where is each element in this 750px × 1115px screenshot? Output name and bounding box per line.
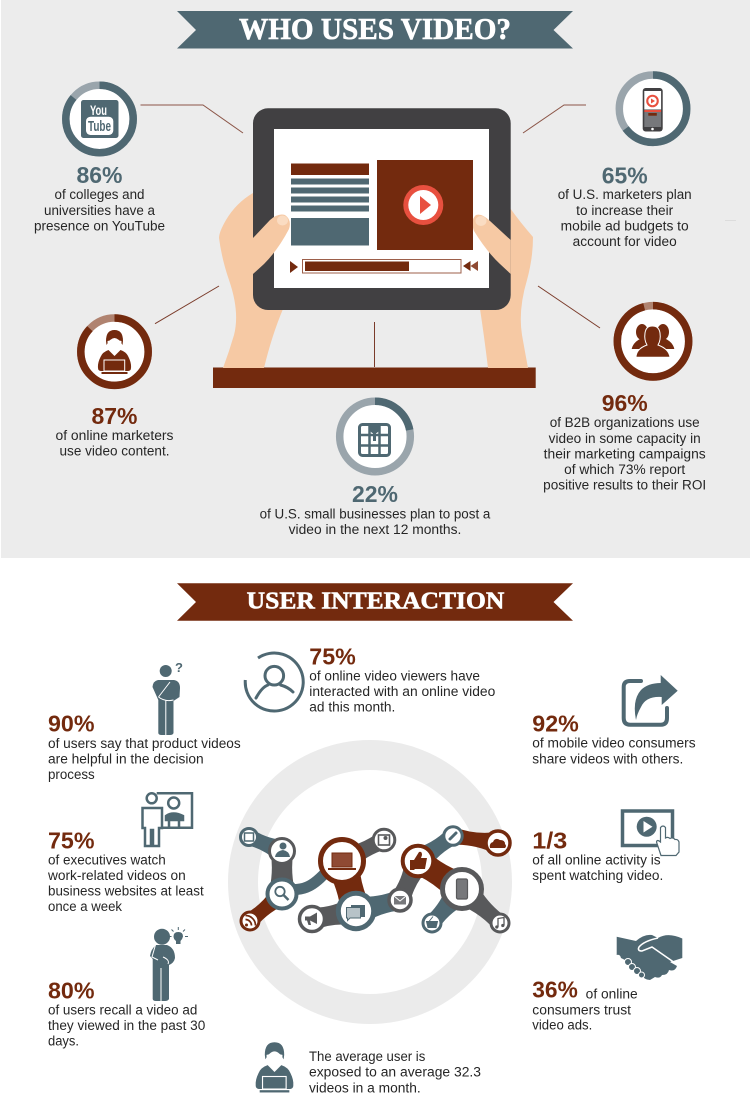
text: 36% trust: 36% — [532, 977, 578, 1003]
text: 75% viewers: interacted with an online video — [309, 684, 495, 699]
stat: marketers 87% — [56, 318, 174, 459]
icon: calendar — [360, 424, 390, 456]
stat: 80% recall — [48, 927, 205, 1048]
left thumb — [253, 215, 290, 274]
text: 80% recall — [48, 977, 205, 1048]
heading banner: user interaction — [177, 583, 573, 621]
stat: small businesses 22% — [260, 401, 491, 537]
stat: mobile 65% — [558, 75, 692, 249]
stat: 36% trust — [532, 935, 682, 1032]
icon: thinking man: ? — [175, 660, 183, 675]
node: basket — [423, 914, 441, 932]
icon: thinking man — [152, 660, 183, 735]
text: average user: The average user is — [309, 1049, 426, 1064]
icon: share arrow — [624, 675, 678, 725]
text: 96%: of B2B organizations use — [550, 415, 700, 430]
text: 65%: mobile ad budgets to — [561, 219, 689, 234]
icon: youtube: You — [90, 102, 107, 118]
text: 90% users: are helpful in the decision — [48, 751, 204, 766]
text: 1/3 activity: of all online activity is — [532, 852, 661, 867]
text: 65%: account for video — [573, 234, 677, 249]
progress bar — [290, 260, 478, 273]
stat: youtube 86% — [34, 85, 165, 234]
text: 75% executives: once a week — [48, 899, 122, 914]
text: 87%: use video content. — [60, 444, 170, 459]
node: add user — [270, 838, 294, 864]
text: 22% — [260, 481, 491, 537]
icon: presenter at screen — [142, 793, 192, 846]
network diagram — [240, 827, 510, 932]
article text block — [291, 164, 369, 246]
text: 75% executives — [47, 827, 204, 914]
text: 96%: their marketing campaigns — [544, 447, 706, 462]
text: 90% users: process — [48, 767, 95, 782]
heading banner: who uses video — [177, 11, 573, 48]
text: 96% — [543, 390, 706, 493]
icon: youtube — [81, 100, 118, 138]
text: 96%: positive results to their ROI — [543, 478, 706, 493]
icon: video with pointer — [622, 811, 679, 856]
stat: b2b 96% — [543, 306, 706, 493]
text: 36% trust — [532, 977, 638, 1032]
text: 75% viewers: of online video viewers have — [309, 669, 480, 684]
text: 80% recall: of users recall a video ad — [48, 1002, 197, 1017]
stat: average user — [256, 1042, 481, 1095]
node: laptop — [320, 840, 364, 882]
stat: 90% users — [48, 660, 241, 782]
stat: 75% viewers — [245, 643, 495, 715]
text: 65%: 65% — [602, 163, 648, 189]
text: 65%: of U.S. marketers plan — [558, 187, 692, 202]
icon: group of people — [632, 324, 674, 357]
text: 86%: of colleges and — [54, 187, 144, 202]
node: search — [268, 880, 296, 908]
text: 75% executives: work-related videos on — [47, 868, 186, 883]
tablet body — [253, 108, 511, 310]
text: 75% executives: 75% — [48, 827, 94, 853]
text: 86%: 86% — [76, 162, 122, 188]
node: music — [491, 914, 509, 932]
donut 87% — [81, 318, 148, 385]
text: 75% viewers: ad this month. — [309, 700, 395, 715]
text: 96%: of which 73% report — [564, 462, 685, 477]
right thumbnail — [476, 216, 486, 226]
text: 92% share: share videos with others. — [532, 751, 683, 766]
node: tablet — [442, 870, 482, 908]
right thumb — [472, 215, 511, 274]
left thumbnail — [277, 216, 288, 226]
text: 75% executives: business websites at least — [48, 884, 204, 899]
connectors — [246, 829, 505, 929]
text: 80% recall: they viewed in the past 30 — [48, 1018, 205, 1033]
node: mail — [389, 889, 411, 911]
text: 87%: 87% — [92, 403, 138, 429]
heading banner: who uses video: WHO USES VIDEO? — [239, 11, 511, 46]
text: 1/3 activity: spent watching video. — [532, 868, 663, 883]
stat: 92% share — [532, 675, 696, 766]
node: cloud — [486, 831, 510, 855]
text: 96%: video in some capacity in — [549, 431, 701, 446]
video player — [377, 160, 473, 250]
text: 90% users: of users say that product videos — [48, 736, 241, 751]
text: 92% share — [532, 711, 696, 766]
panel: who uses video — [1, 0, 750, 558]
tablet illustration — [213, 108, 536, 388]
donut 96% — [617, 306, 689, 377]
text: 80% recall: days. — [48, 1033, 79, 1048]
node: rss — [241, 912, 259, 930]
icon: man with idea bulb — [150, 927, 188, 1001]
left hand — [219, 193, 300, 368]
text: 92% share: of mobile video consumers — [532, 736, 696, 751]
icon: user circle — [245, 653, 303, 711]
text: 75% viewers: 75% — [309, 643, 356, 669]
node: video file — [240, 828, 258, 846]
connector lines — [140, 105, 600, 367]
panel: user interaction — [47, 583, 696, 1095]
text: 36% trust: video ads. — [532, 1018, 592, 1032]
text: 90% users: 90% — [48, 711, 94, 737]
text: 80% recall: 80% — [48, 977, 94, 1003]
text: average user: exposed to an average 32.3 — [309, 1065, 481, 1080]
text: 90% users — [48, 711, 241, 782]
right hand — [465, 208, 533, 368]
text: 92% share: 92% — [532, 711, 579, 737]
text: 86% — [34, 162, 165, 234]
node: thumbs up — [403, 846, 433, 876]
text: 96%: 96% — [602, 390, 648, 416]
node: link — [444, 827, 462, 845]
tablet screen — [274, 129, 489, 288]
text: 36% trust: of online — [586, 986, 638, 1001]
icon: user with laptop — [256, 1042, 293, 1092]
text: average user — [309, 1049, 481, 1095]
node: chat — [338, 893, 374, 929]
text: 87%: of online marketers — [56, 428, 174, 443]
node: megaphone — [300, 906, 324, 932]
text: average user: videos in a month. — [309, 1080, 421, 1095]
icon: phone — [643, 88, 663, 132]
text: 75% viewers — [309, 643, 495, 715]
stat: 1/3 activity — [532, 811, 679, 883]
text: 22%: video in the next 12 months. — [289, 522, 461, 537]
text: 1/3 activity: 1/3 — [532, 827, 567, 853]
heading banner: user interaction: USER INTERACTION — [247, 588, 505, 614]
text: 86%: universities have a — [44, 203, 155, 218]
text: 65% — [558, 163, 692, 249]
stat: 75% executives — [47, 793, 204, 914]
text: 1/3 activity — [532, 827, 663, 883]
node: picture — [373, 829, 395, 851]
donut 86% — [66, 85, 133, 153]
large grey ring — [243, 755, 497, 1009]
icon: youtube: Tube — [88, 118, 111, 135]
text: 22%: of U.S. small businesses plan to post a — [260, 507, 491, 522]
desk — [213, 368, 536, 388]
text: 22%: 22% — [352, 481, 398, 507]
donut 22% — [340, 401, 410, 472]
icon: handshake — [617, 935, 682, 980]
icon: person at laptop — [98, 330, 131, 374]
text: 36% trust: consumers trust — [532, 1002, 631, 1017]
text: 65%: to increase their — [576, 203, 674, 218]
donut 65% — [619, 75, 687, 142]
text: 87% — [56, 403, 174, 459]
text: 86%: presence on YouTube — [34, 219, 165, 234]
text: 75% executives: of executives watch — [48, 852, 166, 867]
